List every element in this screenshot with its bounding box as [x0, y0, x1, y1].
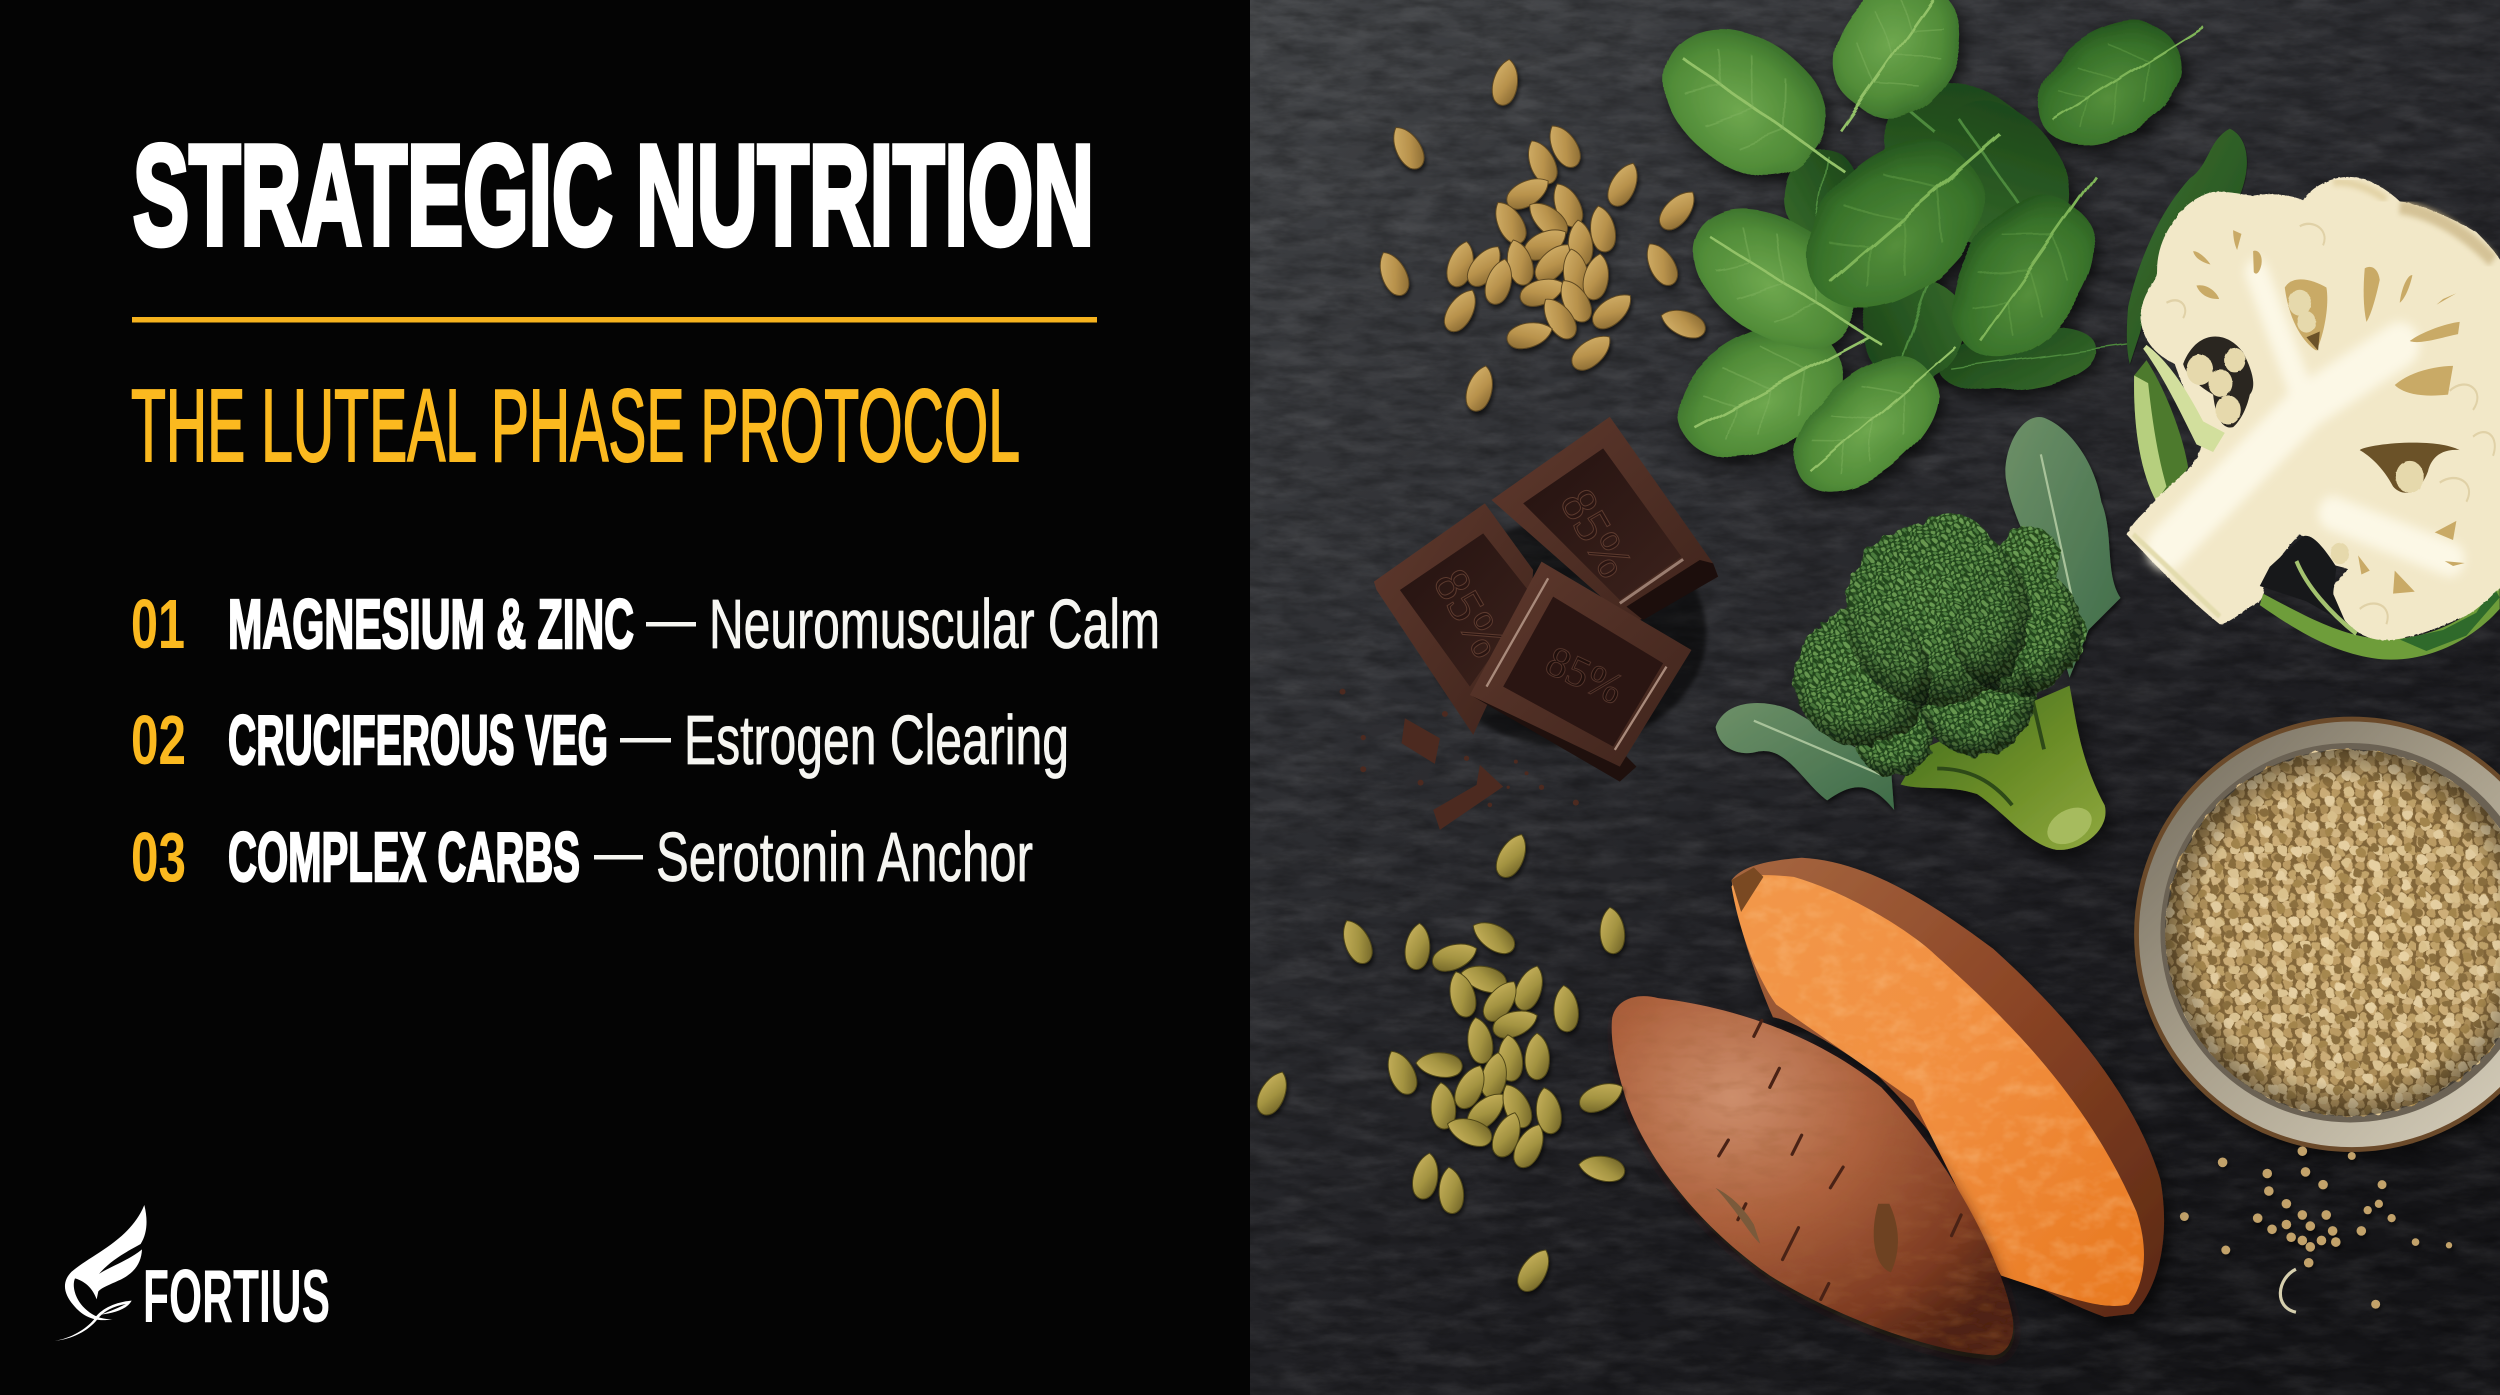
list item 02: 02 [131, 701, 186, 779]
list item 01: 01 [131, 585, 185, 663]
logo: Fortius [55, 1205, 330, 1341]
list item 03: COMPLEX CARBS [228, 818, 580, 896]
icon: feather [55, 1205, 147, 1341]
scattered quinoa [2180, 1146, 2452, 1309]
cauliflower floret shadows [2166, 224, 2495, 624]
list item 02: CRUCIFEROUS VEG [228, 701, 608, 779]
panel: food photo on slate [1250, 0, 2500, 1395]
leaf top right [2037, 20, 2204, 158]
quinoa grains [2165, 749, 2500, 1116]
quinoa sprout curl [2280, 1269, 2296, 1312]
list item 03 [131, 818, 1033, 896]
list item 03: 03 [131, 818, 186, 896]
leaf mid left [1692, 208, 1882, 354]
broccoli back leaf [2005, 417, 2121, 678]
cauliflower trunk highlight [2166, 272, 2450, 559]
back dark leaves [1884, 83, 2017, 243]
cauliflower leaf [2127, 129, 2247, 364]
list item 01 [131, 585, 1160, 663]
cauliflower lower green band [2260, 586, 2500, 660]
bowl [2136, 719, 2500, 1150]
broccoli lower-left leaf [1716, 703, 1894, 810]
pumpkin seeds: lower cluster [1252, 829, 1628, 1296]
panel: left black text panel [0, 0, 1250, 1395]
broccoli [1716, 417, 2121, 852]
square 1 [1492, 417, 1718, 620]
cauliflower left rib [2134, 360, 2188, 502]
square 3: 85% [1539, 637, 1631, 714]
dark chocolate squares [1340, 417, 1718, 830]
pumpkin seeds: upper cluster [1373, 57, 1709, 414]
cauliflower cavities [2193, 230, 2465, 594]
square 2: 85% [1423, 559, 1517, 666]
list item 02: Estrogen Clearing [684, 701, 1069, 779]
bowl of quinoa [2136, 719, 2500, 1150]
square 1: 85% [1550, 479, 1644, 586]
square 2 [1374, 503, 1533, 735]
list item 01: Neuromuscular Calm [709, 585, 1160, 663]
leaf right [1954, 176, 2104, 356]
cauliflower half [2126, 129, 2500, 660]
wordmark: FORTIUS [143, 1254, 330, 1338]
divider rule [132, 317, 1097, 322]
sweet potato: cut half [1732, 858, 2164, 1317]
leaf lower left [1677, 331, 1870, 470]
leaf bottom [1793, 346, 1956, 504]
cauliflower deep gaps [2360, 443, 2460, 493]
leaf top left [1662, 28, 1846, 188]
leaf centre large [1806, 133, 2002, 315]
spinach leaves [1662, 0, 2204, 504]
list item 03: Serotonin Anchor [656, 818, 1033, 896]
list item 01: MAGNESIUM & ZINC [228, 585, 634, 663]
chocolate chips and crumbs [1340, 689, 1579, 830]
square 3 [1470, 562, 1691, 782]
sweet potato: whole [1612, 996, 2013, 1355]
subtitle: THE LUTEAL PHASE PROTOCOL [131, 368, 1020, 483]
cauliflower top shading [2400, 207, 2493, 261]
cauliflower head [2126, 177, 2500, 640]
title: STRATEGIC NUTRITION [133, 116, 1094, 275]
leaf top centre [1832, 0, 1970, 132]
broccoli stalk [1901, 686, 2106, 850]
broccoli florets [1794, 513, 2087, 776]
slate background [1250, 0, 2500, 1395]
